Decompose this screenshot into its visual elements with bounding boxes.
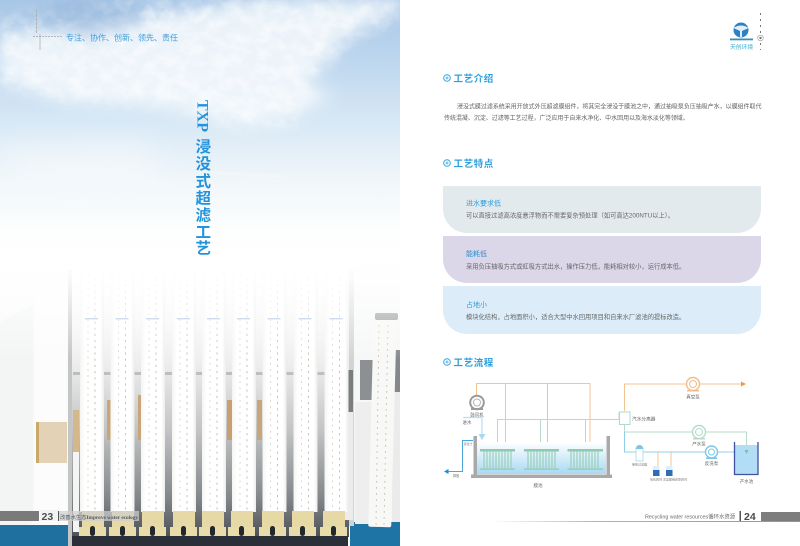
intro paragraph [444, 102, 761, 122]
footer left: 改善水生态Improve water ecology [60, 513, 138, 521]
card: low feed water requirement [443, 186, 761, 233]
side ornament [758, 13, 763, 50]
cartridge filter: 保安过滤器 [632, 462, 647, 466]
floor left [0, 525, 72, 546]
vertical title [196, 100, 211, 255]
footer right [490, 511, 800, 523]
air pipes [476, 384, 590, 449]
vertical title: TXP [194, 100, 210, 132]
membrane tank [471, 436, 612, 489]
intro paragraph: 传统混凝、沉淀、过滤等工艺过程，广泛应用于自来水净化、中水回用以及海水淡化等领域。 [444, 114, 689, 122]
product pump [692, 426, 706, 448]
heading: process introduction: 工艺介绍 [454, 73, 494, 85]
chemical tanks [650, 452, 687, 482]
panel: left photo page [0, 0, 400, 546]
left spare tubes [36, 422, 67, 463]
permeate pipes [498, 412, 619, 449]
logo [730, 22, 753, 51]
footer left: 23 [42, 511, 53, 523]
drain [444, 440, 473, 478]
right spare backdrop [355, 350, 400, 524]
footer right: 24 [744, 511, 756, 523]
logo: 天创环境 [730, 43, 753, 51]
backwash pump [705, 446, 719, 467]
footer right: Recycling water resources循环水资源 [645, 512, 736, 520]
feed water [462, 418, 486, 440]
blower [470, 396, 484, 418]
membrane cassettes [480, 449, 603, 470]
panel: right page [443, 13, 800, 523]
tagline: 专注、协作、创新、领先、责任 [66, 32, 178, 42]
card: low energy [443, 236, 761, 283]
vertical title: 艺 [196, 240, 211, 258]
card: small footprint: 模块化结构，占地面积小，适合大型中水回用项目和自来水厂滤池的提标改造。 [466, 312, 685, 321]
cartridge filter [632, 445, 647, 466]
heading: process flow: 工艺流程 [454, 357, 494, 369]
card: low feed water requirement: 进水要求低 [466, 198, 501, 208]
drain: 排放 [453, 473, 460, 478]
vacuum pump [686, 378, 700, 400]
vertical title: 没 [196, 155, 212, 173]
footer left [0, 510, 139, 521]
floor right [350, 522, 400, 546]
tagline crosshair [33, 10, 63, 50]
right single tube [368, 313, 398, 527]
steam-water separator: 汽水分离器 [632, 416, 656, 422]
heading: process features: 工艺特点 [454, 158, 494, 170]
vertical title: 滤 [196, 206, 212, 224]
card: low energy: 采用负压抽吸方式或虹吸方式出水，操作压力低，能耗相对较小，运行成本低。 [466, 262, 685, 270]
product water tank [734, 442, 758, 485]
blower: 鼓风机 [470, 412, 484, 418]
chemical tanks: 次氯酸钠还原药剂 [663, 476, 687, 482]
intro paragraph: 浸没式膜过滤系统采用开放式外压超滤膜组件，将其完全浸没于膜池之中，通过抽吸泵负压抽吸产水，以膜组件取代 [457, 102, 761, 110]
product line [624, 424, 746, 451]
vacuum pump: 真空泵 [686, 394, 700, 400]
vertical title: 工 [196, 224, 211, 242]
vertical title: 浸 [196, 138, 211, 156]
sky with clouds [0, 0, 400, 208]
drain: 液位计 [464, 442, 472, 446]
vertical title: 式 [196, 172, 212, 190]
card: low energy: 能耗低 [466, 249, 487, 258]
feed water: 进水 [462, 419, 472, 426]
photo fade to sky [68, 262, 400, 354]
backwash pump: 反洗泵 [705, 460, 719, 467]
steam-water separator [620, 412, 656, 424]
frame [68, 270, 354, 546]
membrane tank: 膜池 [534, 482, 543, 489]
backwash line [624, 432, 734, 452]
product water tank: 产水池 [740, 478, 754, 485]
membrane module photo [0, 250, 400, 546]
tube bases [72, 511, 348, 546]
vacuum line [624, 382, 746, 411]
vertical title: 超 [196, 190, 212, 208]
card: small footprint: 占地小 [466, 300, 487, 309]
process flow diagram [444, 378, 758, 489]
nine membrane tubes [80, 270, 348, 512]
product pump: 产水泵 [692, 440, 706, 448]
card: low feed water requirement: 可以直接过滤高浓度悬浮物而不需要复杂预处理（如可高达200NTU以上）。 [466, 210, 674, 220]
chemical tanks: 氧化药剂 [650, 476, 662, 482]
card: small footprint [443, 286, 761, 334]
